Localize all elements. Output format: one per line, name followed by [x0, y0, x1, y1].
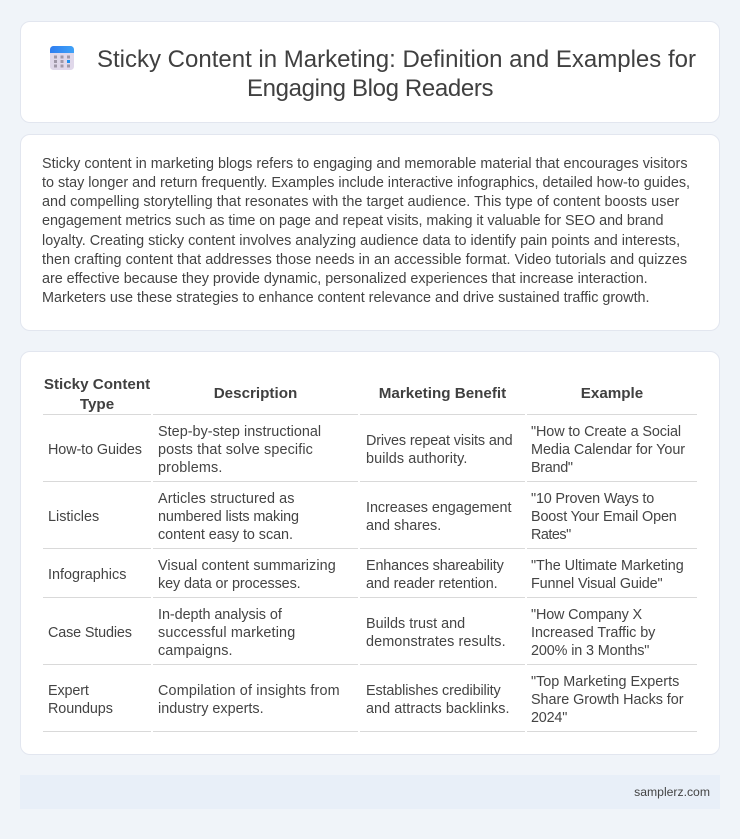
table row: Case Studies: 200% in 3 Months" — [531, 643, 649, 659]
intro text — [42, 156, 690, 306]
table row: Listicles: "10 Proven Ways to — [531, 491, 654, 507]
header: Marketing Benefit: Marketing Benefit — [379, 385, 506, 402]
table row: How-to Guides: posts that solve specific — [158, 442, 313, 458]
intro text: and compelling storytelling that resonates with the target audience. This type of content boosts user — [42, 194, 679, 210]
header: Sticky Content Type: Type — [80, 396, 114, 413]
icon: calendar — [50, 46, 74, 70]
table row: Expert Roundups: "Top Marketing Experts — [531, 674, 679, 690]
table row: Listicles: Increases engagement — [366, 500, 511, 516]
table row: Expert Roundups: industry experts. — [158, 701, 264, 717]
table row: Case Studies: Builds trust and — [366, 616, 465, 632]
intro text: engagement metrics such as time on page and repeat visits, making it valuable for SEO and brand — [42, 213, 663, 229]
intro text: are effective because they provide dynamic, personalized experiences that increase interaction. — [42, 271, 648, 287]
table row: Expert Roundups: Share Growth Hacks for — [531, 692, 683, 708]
table row: Expert Roundups: and attracts backlinks. — [366, 701, 510, 717]
table row: Case Studies: Case Studies — [48, 625, 132, 641]
table row: Case Studies: Increased Traffic by — [531, 625, 655, 641]
table row: Listicles — [48, 491, 677, 543]
intro text: Marketers use these strategies to enhance content relevance and drive sustained traffic growth. — [42, 290, 650, 306]
table row: How-to Guides: How-to Guides — [48, 442, 142, 458]
table row: How-to Guides: Brand" — [531, 460, 573, 476]
table row: Expert Roundups: Establishes credibility — [366, 683, 501, 699]
table row: Case Studies: successful marketing — [158, 625, 295, 641]
table row: How-to Guides: builds authority. — [366, 451, 467, 467]
table header row — [44, 376, 643, 413]
header: Example: Example — [581, 385, 643, 402]
table row: How-to Guides — [48, 424, 685, 476]
table row: Case Studies: campaigns. — [158, 643, 233, 659]
table row: Listicles: and shares. — [366, 518, 441, 534]
table row: Case Studies — [48, 607, 656, 659]
title — [97, 46, 696, 102]
intro text: Sticky content in marketing blogs refers to engaging and memorable material that encourages visitors — [42, 156, 688, 172]
table row: Infographics: Visual content summarizing — [158, 558, 336, 574]
table row: How-to Guides: Media Calendar for Your — [531, 442, 685, 458]
table row: Infographics: "The Ultimate Marketing — [531, 558, 684, 574]
panel: title card — [20, 21, 720, 123]
table row: How-to Guides: "How to Create a Social — [531, 424, 681, 440]
table row: Listicles: Rates" — [531, 527, 571, 543]
table row: Infographics: and reader retention. — [366, 576, 498, 592]
intro text: then crafting content that addresses those needs in an accessible format. Video tutorials and quizzes — [42, 252, 687, 268]
footer bar — [20, 775, 720, 809]
header: Sticky Content Type: Sticky Content — [44, 376, 150, 393]
title: Engaging Blog Readers — [247, 75, 493, 102]
table row: Case Studies: "How Company X — [531, 607, 642, 623]
table row: How-to Guides: Step-by-step instructional — [158, 424, 321, 440]
panel: intro paragraph card — [20, 134, 720, 331]
footer text: samplerz.com: samplerz.com — [634, 785, 710, 799]
table row: Expert Roundups: Compilation of insights from — [158, 683, 340, 699]
table row: Expert Roundups: 2024" — [531, 710, 567, 726]
table row: Expert Roundups: Expert — [48, 683, 89, 699]
table row: Listicles: numbered lists making — [158, 509, 299, 525]
panel: table card — [20, 351, 720, 755]
table row: Infographics: key data or processes. — [158, 576, 301, 592]
table row: Infographics: Enhances shareability — [366, 558, 504, 574]
table row: Expert Roundups: Roundups — [48, 701, 113, 717]
table row: Listicles: content easy to scan. — [158, 527, 293, 543]
header: Description: Description — [214, 385, 297, 402]
table row: Listicles: Boost Your Email Open — [531, 509, 677, 525]
table row: How-to Guides: Drives repeat visits and — [366, 433, 512, 449]
table row: Expert Roundups — [48, 674, 684, 726]
table row: Case Studies: demonstrates results. — [366, 634, 506, 650]
table row: Infographics: Infographics — [48, 567, 126, 583]
title: Sticky Content in Marketing: Definition and Examples for — [97, 46, 696, 73]
intro text: to stay longer and return frequently. Examples include interactive infographics, detailed how-to guides, — [42, 175, 690, 191]
table row: Case Studies: In-depth analysis of — [158, 607, 282, 623]
table row: Infographics: Funnel Visual Guide" — [531, 576, 662, 592]
table row: Listicles: Listicles — [48, 509, 99, 525]
table row: Infographics — [48, 558, 684, 592]
table row: How-to Guides: problems. — [158, 460, 223, 476]
intro text: loyalty. Creating sticky content involves analyzing audience data to identify pain points and interests, — [42, 233, 680, 249]
table row: Listicles: Articles structured as — [158, 491, 295, 507]
header: Sticky Content Type — [44, 376, 150, 413]
